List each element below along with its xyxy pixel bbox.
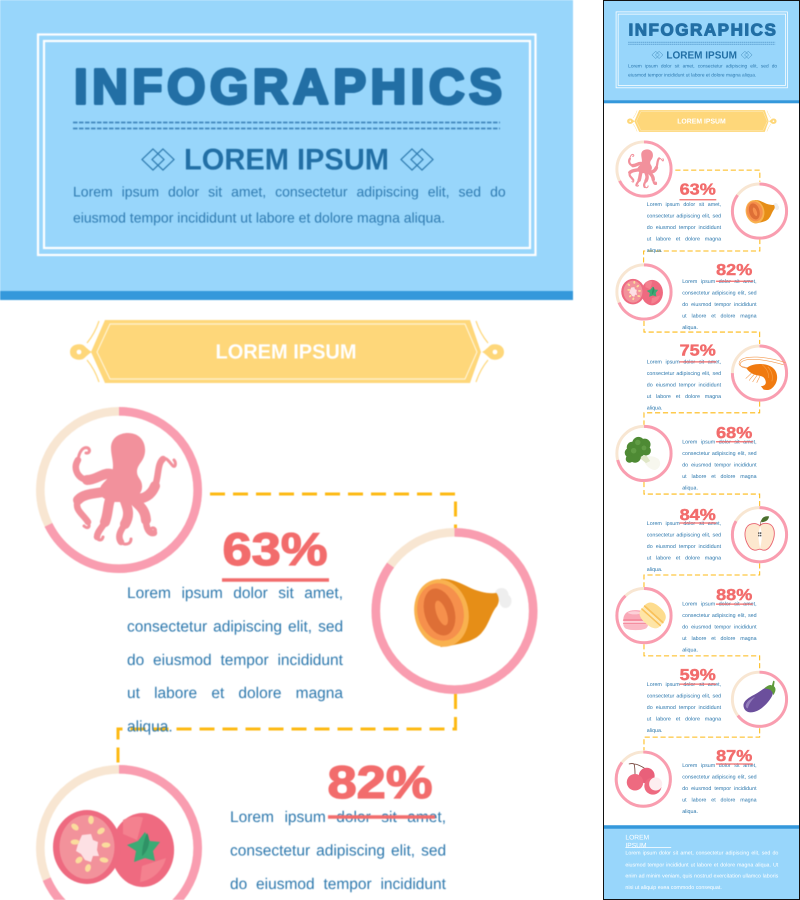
text block: 63%: consectetur adipiscing elit, sed <box>646 213 721 219</box>
footer text block <box>625 850 778 890</box>
text block: 63%: do eiusmod tempor incididunt <box>127 652 344 669</box>
header text block <box>628 63 777 78</box>
icon: diamonds right <box>401 149 433 170</box>
text block: 63%: aliqua. <box>646 247 662 253</box>
stat: 88%: do eiusmod tempor incididunt <box>682 624 756 630</box>
dashed connectors <box>118 494 456 765</box>
stat: 75%: do eiusmod tempor incididunt <box>646 382 721 388</box>
stat: 59%: 59% <box>679 666 715 683</box>
dashed connectors <box>643 170 760 750</box>
stat: 84%: aliqua. <box>646 567 662 572</box>
stat: 82%: 82% <box>328 756 432 808</box>
stat: 75%: 75% <box>679 341 715 359</box>
footer text block: Lorem ipsum dolor sit amet, consectetur adipiscing elit, sed do <box>625 850 778 856</box>
stat: 68% <box>682 423 756 491</box>
stat: 68%: ut labore et dolore magna <box>682 473 756 479</box>
stat: 68%: 68% <box>716 423 752 441</box>
stat: 59%: Lorem ipsum dolor sit amet, <box>646 681 721 687</box>
header frame <box>38 34 536 255</box>
stat: 82%: consectetur adipiscing elit, sed <box>682 290 756 296</box>
stat: 88%: consectetur adipiscing elit, sed <box>682 613 756 619</box>
stat: 68%: Lorem ipsum dolor sit amet, <box>682 439 756 445</box>
header frame <box>616 12 787 88</box>
subtitle: LOREM IPSUM <box>666 49 737 61</box>
stat: 82%: consectetur adipiscing elit, sed <box>230 842 446 859</box>
stat: 87%: Lorem ipsum dolor sit amet, <box>682 762 756 768</box>
icon: octopus ring <box>40 411 198 569</box>
stat: 84%: Lorem ipsum dolor sit amet, <box>646 521 721 526</box>
stat: 75%: consectetur adipiscing elit, sed <box>646 371 721 376</box>
stat: 82%: aliqua. <box>682 325 698 330</box>
stat: 59%: ut labore et dolore magna <box>646 716 721 722</box>
footer text block: nisi ut aliquip exea commodo consequat. <box>625 885 721 890</box>
stat: 87%: ut labore et dolore magna <box>682 797 756 803</box>
icon: meat ring <box>376 532 533 690</box>
icon: broccoli ring <box>617 426 671 481</box>
stat: 84%: do eiusmod tempor incididunt <box>646 544 721 549</box>
header text block: Lorem ipsum dolor sit amet, consectetur adipiscing elit, sed do <box>628 63 777 69</box>
icon: tomato ring <box>617 265 671 319</box>
footer text block: enim ad minim veniam, quis nostrud exercitation ullamco laboris <box>625 873 778 879</box>
icon: macaron ring <box>617 589 671 643</box>
title: INFOGRAPHICS <box>628 20 776 39</box>
icon: tomato ring <box>40 769 198 900</box>
text block: 63%: aliqua. <box>127 719 173 736</box>
header text block: eiusmod tempor incididunt ut labore et dolore magna aliqua. <box>73 210 445 226</box>
icon: diamonds left <box>652 51 663 59</box>
stat: 87%: 87% <box>716 746 752 764</box>
header background <box>0 0 573 300</box>
stat: 82%: do eiusmod tempor incididunt <box>230 876 447 893</box>
stat: 88%: ut labore et dolore magna <box>682 636 756 641</box>
stat: 82%: 82% <box>716 260 752 278</box>
icon: eggplant ring <box>732 672 786 726</box>
stat: 88% <box>682 586 756 653</box>
icon: octopus ring <box>617 142 671 196</box>
text block: 63%: Lorem ipsum dolor sit amet, <box>127 585 343 602</box>
text block: 63%: ut labore et dolore magna <box>127 685 343 702</box>
stat: 84%: 84% <box>679 506 715 524</box>
stat: 75%: Lorem ipsum dolor sit amet, <box>646 359 721 365</box>
stat: 87%: do eiusmod tempor incididunt <box>682 785 756 791</box>
panel: full infographic view <box>604 1 799 899</box>
header background <box>603 0 800 103</box>
banner: LOREM IPSUM <box>216 340 356 364</box>
stat: 68%: consectetur adipiscing elit, sed <box>682 450 756 456</box>
stat: 88%: 88% <box>716 586 752 604</box>
stat: 63%: 63% <box>222 523 328 575</box>
header text block <box>73 184 506 226</box>
banner <box>70 320 504 383</box>
stat: 87%: aliqua. <box>682 808 698 814</box>
footer panel <box>603 825 800 900</box>
footer heading: LOREM <box>625 834 649 841</box>
stat: 68%: aliqua. <box>682 485 698 491</box>
banner <box>627 110 776 132</box>
header text block: eiusmod tempor incididunt ut labore et dolore magna aliqua. <box>628 72 756 78</box>
icon: cherry ring <box>616 752 670 806</box>
footer heading: IPSUM <box>625 841 646 849</box>
text block: 63%: consectetur adipiscing elit, sed <box>127 618 343 635</box>
footer text block: eiusmod tempor incididunt ut labore et dolore magna aliqua. Ut <box>625 862 778 868</box>
stat: 82% <box>230 756 447 893</box>
stat: 84%: consectetur adipiscing elit, sed <box>646 532 721 538</box>
stat: 59%: consectetur adipiscing elit, sed <box>646 693 721 699</box>
stat: 68%: do eiusmod tempor incididunt <box>682 462 756 468</box>
stat: 59% <box>646 666 721 733</box>
stat: 82%: Lorem ipsum dolor sit amet, <box>230 809 446 826</box>
icon: apple ring <box>732 508 786 562</box>
text block: 63%: ut labore et dolore magna <box>646 236 721 242</box>
stat: 87% <box>682 746 756 814</box>
stat: 84%: ut labore et dolore magna <box>646 555 721 561</box>
icon: diamonds left <box>142 149 174 170</box>
text block: 63%: do eiusmod tempor incididunt <box>646 224 721 230</box>
stat: 82% <box>682 260 756 330</box>
subtitle: LOREM IPSUM <box>184 144 389 176</box>
stat: 87%: consectetur adipiscing elit, sed <box>682 774 756 780</box>
banner: LOREM IPSUM <box>677 117 725 125</box>
footer heading <box>625 834 671 849</box>
stat: 63%: 63% <box>679 180 715 198</box>
panel: enlarged detail view <box>0 0 574 900</box>
stat: 82%: Lorem ipsum dolor sit amet, <box>682 279 756 284</box>
stat: 75% <box>646 341 721 411</box>
title: INFOGRAPHICS <box>74 59 502 114</box>
icon: shrimp ring <box>732 346 786 400</box>
stat: 59%: aliqua. <box>646 727 662 733</box>
stat: 88%: aliqua. <box>682 647 698 653</box>
stat: 88%: Lorem ipsum dolor sit amet, <box>682 601 756 607</box>
stat: 75%: aliqua. <box>646 405 662 411</box>
header text block: Lorem ipsum dolor sit amet, consectetur adipiscing elit, sed do <box>73 184 506 200</box>
stat: 59%: do eiusmod tempor incididunt <box>646 704 721 710</box>
icon: meat ring <box>732 184 786 238</box>
icon: diamonds right <box>741 51 752 59</box>
text block: 63%: Lorem ipsum dolor sit amet, <box>646 201 721 207</box>
text block: 63% <box>646 201 721 253</box>
stat: 82%: ut labore et dolore magna <box>682 313 756 319</box>
stat: 84% <box>646 506 721 572</box>
stat: 75%: ut labore et dolore magna <box>646 394 721 399</box>
stat: 82%: do eiusmod tempor incididunt <box>682 302 756 307</box>
text block: 63% <box>127 585 344 736</box>
